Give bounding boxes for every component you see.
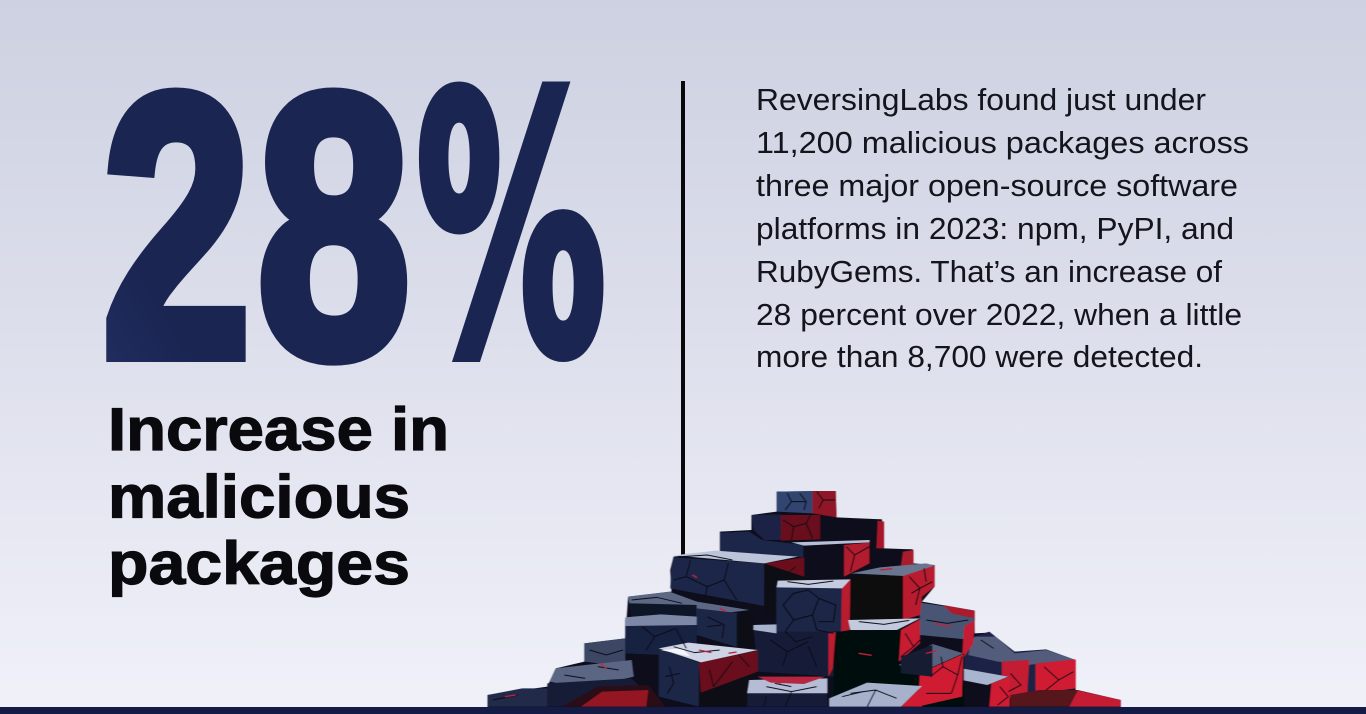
second tier (821, 519, 884, 548)
body paragraph: platforms in 2023: npm, PyPI, and (756, 211, 1234, 246)
body paragraph: 11,200 malicious packages across (756, 125, 1249, 160)
center tall block (754, 627, 834, 677)
back right low blocks (964, 632, 1076, 697)
heading: Increase in malicious packages: Increase in (108, 396, 449, 463)
front right light block (829, 683, 922, 707)
big statistic: 28% (102, 17, 606, 436)
bottom dark band (0, 707, 1366, 714)
cracks (493, 492, 1073, 707)
body paragraph (756, 82, 1249, 374)
top block (777, 491, 813, 513)
icon: pile of cracked navy and red blocks (486, 491, 1122, 707)
big left block (670, 557, 764, 606)
body paragraph: more than 8,700 were detected. (756, 339, 1203, 374)
body paragraph: three major open-source software (756, 168, 1238, 203)
lower left blocks (584, 638, 625, 667)
vertical divider line (681, 81, 685, 561)
body paragraph: ReversingLabs found just under (756, 82, 1206, 117)
heading: Increase in malicious packages (108, 396, 449, 598)
mid left blocks (628, 592, 749, 617)
back right block on 1050 (920, 603, 975, 660)
pile silhouette backing (488, 491, 1121, 707)
red flecks on top faces (505, 569, 951, 697)
big statistic: 28%: 2 (102, 18, 251, 434)
big statistic: 28%: % (416, 23, 606, 436)
upper right block (850, 575, 903, 620)
right center tier (834, 630, 964, 707)
body paragraph: RubyGems. That’s an increase of (756, 254, 1222, 289)
big statistic: 28%: 8 (257, 17, 411, 435)
heading: Increase in malicious packages: malicious (108, 464, 410, 530)
heading: Increase in malicious packages: packages (108, 530, 410, 597)
body paragraph: 28 percent over 2022, when a little (756, 297, 1242, 332)
front center block (659, 648, 699, 707)
